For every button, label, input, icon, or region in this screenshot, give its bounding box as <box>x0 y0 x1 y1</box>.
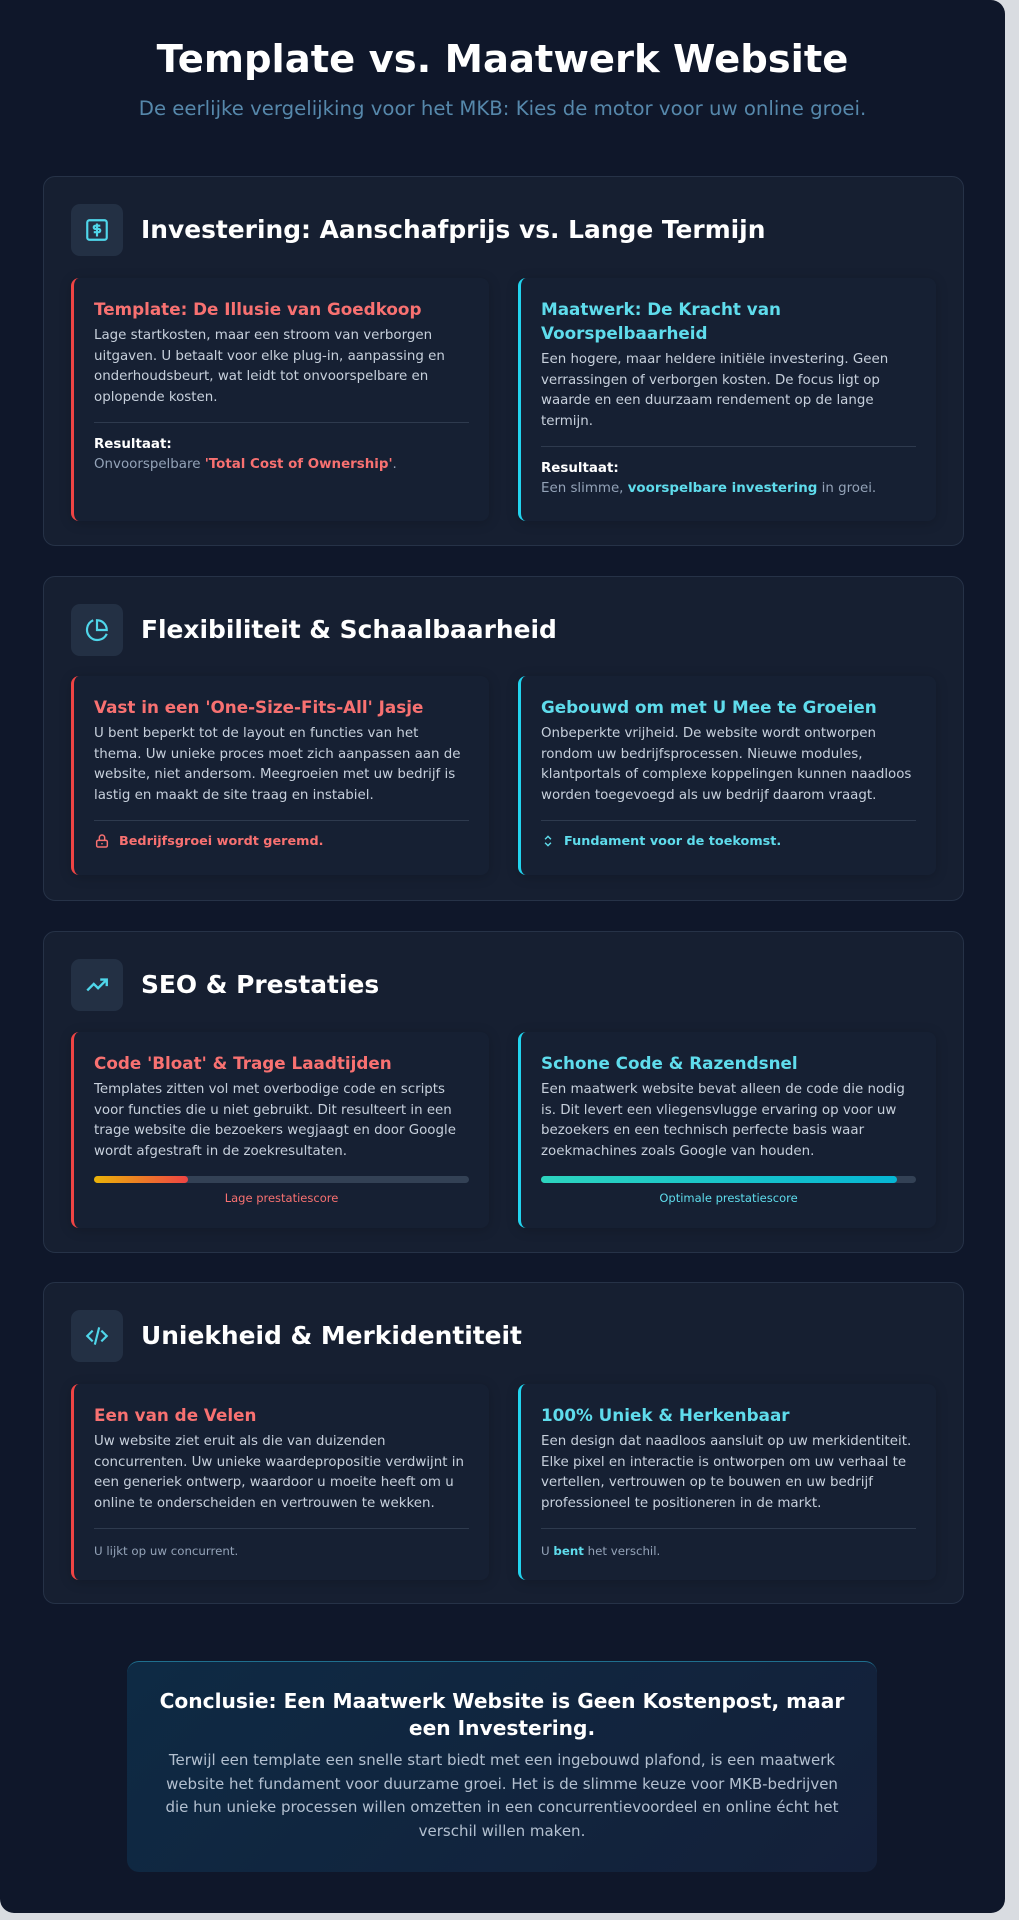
card: template: Onvoorspelbare 'Total Cost of Ownership'. <box>94 457 397 472</box>
card: template <box>71 1384 489 1580</box>
icon: code <box>71 1310 123 1362</box>
title: Template vs. Maatwerk Website <box>157 37 848 82</box>
card: maatwerk: Maatwerk: De Kracht van Voorspelbaarheid <box>541 299 781 343</box>
card: template <box>71 1032 489 1228</box>
panel: flexibiliteit <box>43 576 964 901</box>
card: template: Resultaat: <box>94 437 172 452</box>
footer: chevrons: Fundament voor de toekomst. <box>564 834 781 848</box>
card: template <box>71 278 489 521</box>
card: template: U bent beperkt tot de layout en functies van het thema. Uw unieke proces moet zich aanpassen aan de website, niet andersom. Meegroeien met uw bedrijf is lastig en maakt de site traag en instabiel. <box>94 726 460 802</box>
card: maatwerk: 100% Uniek & Herkenbaar <box>541 1405 790 1425</box>
heading: Flexibiliteit & Schaalbaarheid <box>141 615 557 644</box>
heading: Uniekheid & Merkidentiteit <box>141 1321 522 1350</box>
footer: lock: Bedrijfsgroei wordt geremd. <box>119 834 324 848</box>
bar: low score <box>94 1176 469 1183</box>
card: maatwerk: Optimale prestatiescore <box>659 1191 798 1205</box>
panel: uniekheid <box>43 1282 964 1604</box>
card: maatwerk: Een slimme, voorspelbare investering in groei. <box>541 481 876 496</box>
card: maatwerk <box>518 676 936 875</box>
subtitle: De eerlijke vergelijking voor het MKB: Kies de motor voor uw online groei. <box>139 97 866 120</box>
bar: high score <box>541 1176 916 1183</box>
panel: SEO <box>43 931 964 1253</box>
card: maatwerk: U bent het verschil. <box>541 1544 660 1558</box>
card: template: Template: De Illusie van Goedkoop <box>94 299 421 319</box>
icon: pie chart <box>71 604 123 656</box>
card: template <box>71 676 489 875</box>
panel: investering <box>43 176 964 546</box>
card: maatwerk: Schone Code & Razendsnel <box>541 1053 798 1073</box>
card: maatwerk: Resultaat: <box>541 461 619 476</box>
conclusion: Conclusie: Een Maatwerk Website is Geen Kostenpost, maar een Investering. <box>160 1689 844 1740</box>
heading: SEO & Prestaties <box>141 970 379 999</box>
conclusion: Terwijl een template een snelle start biedt met een ingebouwd plafond, is een maatwerk website het fundament voor duurzame groei. Het is de slimme keuze voor MKB-bedrijven die hun unieke processen willen omzetten in een concurrentievoordeel en online écht het verschil willen maken. <box>165 1751 839 1840</box>
conclusion <box>127 1661 877 1872</box>
card: maatwerk: Gebouwd om met U Mee te Groeien <box>541 697 877 717</box>
heading: Investering: Aanschafprijs vs. Lange Termijn <box>141 215 765 244</box>
card: maatwerk: Een maatwerk website bevat alleen de code die nodig is. Dit levert een vliegensvlugge ervaring op voor uw bezoekers en een technisch perfecte basis waar zoekmachines zoals Google van houden. <box>541 1082 905 1158</box>
card: template: Lage startkosten, maar een stroom van verborgen uitgaven. U betaalt voor elke plug-in, aanpassing en onderhoudsbeurt, wat leidt tot onvoorspelbare en oplopende kosten. <box>94 328 445 404</box>
card: template: Een van de Velen <box>94 1405 256 1425</box>
icon: dollar <box>71 204 123 256</box>
card: template: Uw website ziet eruit als die van duizenden concurrenten. Uw unieke waardepropositie verdwijnt in een generiek ontwerp, waardoor u moeite heeft om u online te onderscheiden en vertrouwen te wekken. <box>94 1434 464 1510</box>
card: template: Code 'Bloat' & Trage Laadtijden <box>94 1053 392 1073</box>
card: maatwerk: Een design dat naadloos aansluit op uw merkidentiteit. Elke pixel en interactie is ontworpen om uw verhaal te vertellen, vertrouwen op te bouwen en uw bedrijf professioneel te positioneren in de markt. <box>541 1434 911 1510</box>
card: maatwerk <box>518 1384 936 1580</box>
card: template: U lijkt op uw concurrent. <box>94 1544 238 1558</box>
card: template: Vast in een 'One-Size-Fits-All' Jasje <box>94 697 423 717</box>
card: template: Templates zitten vol met overbodige code en scripts voor functies die u niet gebruikt. Dit resulteert in een trage website die bezoekers wegjaagt en door Google wordt afgestraft in de zoekresultaten. <box>94 1082 456 1158</box>
card: maatwerk: Een hogere, maar heldere initiële investering. Geen verrassingen of verborgen kosten. De focus ligt op waarde en een duurzaam rendement op de lange termijn. <box>541 352 888 428</box>
icon: trend <box>71 959 123 1011</box>
card: maatwerk <box>518 1032 936 1228</box>
card: maatwerk: Onbeperkte vrijheid. De website wordt ontworpen rondom uw bedrijfsprocessen. Nieuwe modules, klantportals of complexe koppelingen kunnen naadloos worden toegevoegd als uw bedrijf daarom vraagt. <box>541 726 911 802</box>
card: maatwerk <box>518 278 936 521</box>
card: template: Lage prestatiescore <box>225 1191 338 1205</box>
